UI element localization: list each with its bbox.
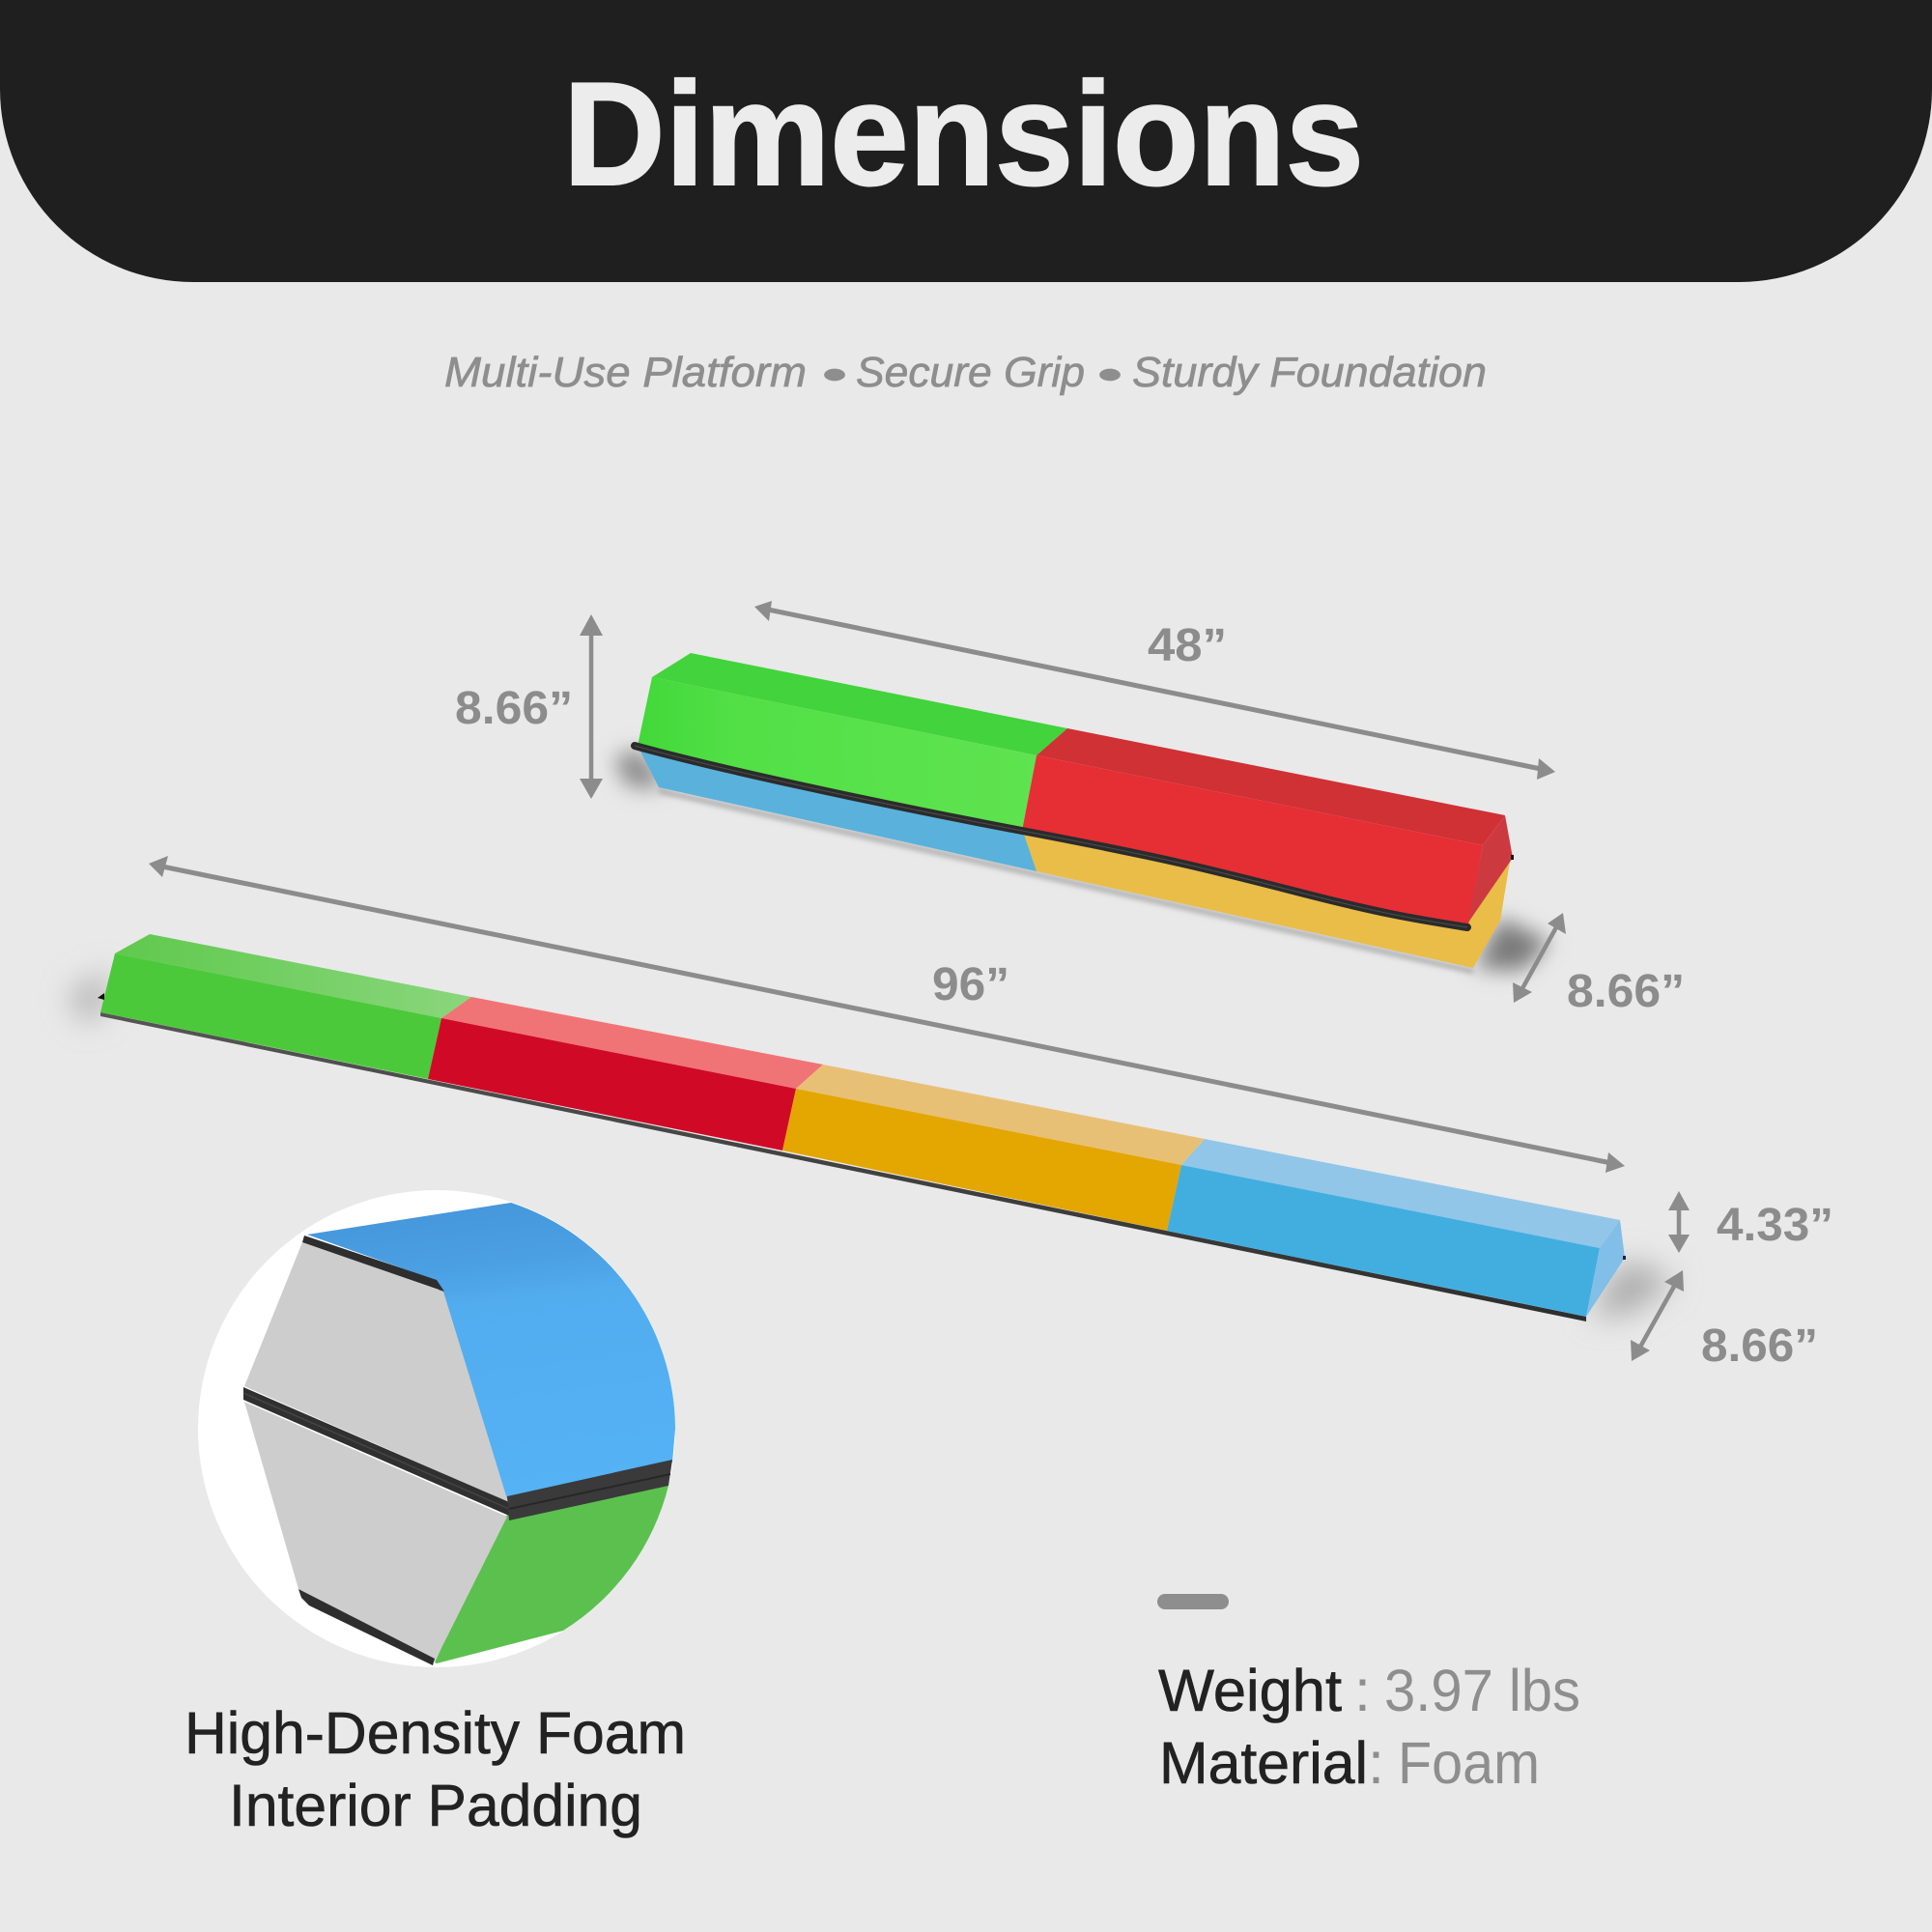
arrow: short beam height	[580, 614, 603, 799]
arrow: 48 inch length	[754, 601, 1555, 780]
specs: weight and material	[1158, 1658, 1580, 1796]
arrow: short beam width	[1513, 913, 1566, 1003]
caption: foam padding	[185, 1700, 686, 1838]
subtitle: feature list	[444, 349, 1487, 396]
title: Dimensions	[563, 52, 1364, 216]
arrow: long beam height	[1668, 1191, 1690, 1253]
header band	[0, 0, 1932, 282]
caption: foam padding: Interior Padding	[229, 1773, 642, 1838]
subtitle: feature list: Secure Grip	[856, 349, 1085, 396]
specs: weight and material: Material	[1159, 1730, 1368, 1796]
subtitle: feature list: Multi-Use Platform	[444, 349, 807, 396]
label: long beam height: 4.33”	[1717, 1200, 1833, 1251]
label: 96 inch: 96”	[932, 959, 1009, 1010]
label: 48 inch: 48”	[1148, 620, 1227, 671]
label: short beam height: 8.66”	[455, 683, 573, 734]
label: short beam width: 8.66”	[1567, 966, 1685, 1017]
caption: foam padding: High-Density Foam	[185, 1700, 686, 1766]
specs: weight and material: :	[1354, 1658, 1371, 1723]
accent dash	[1157, 1594, 1229, 1609]
circle: foam cross-section	[198, 1190, 675, 1667]
48 inch beam	[613, 653, 1550, 974]
specs: weight and material: 3.97 lbs	[1384, 1658, 1580, 1723]
specs: weight and material: :	[1368, 1730, 1384, 1796]
specs: weight and material: Foam	[1398, 1730, 1540, 1796]
arrow: 96 inch length	[149, 856, 1625, 1173]
specs: weight and material: Weight	[1158, 1658, 1342, 1723]
arrow: long beam width	[1631, 1270, 1684, 1361]
label: long beam width: 8.66”	[1701, 1321, 1818, 1372]
subtitle: feature list: Sturdy Foundation	[1132, 349, 1487, 396]
96 inch beam	[70, 934, 1676, 1321]
